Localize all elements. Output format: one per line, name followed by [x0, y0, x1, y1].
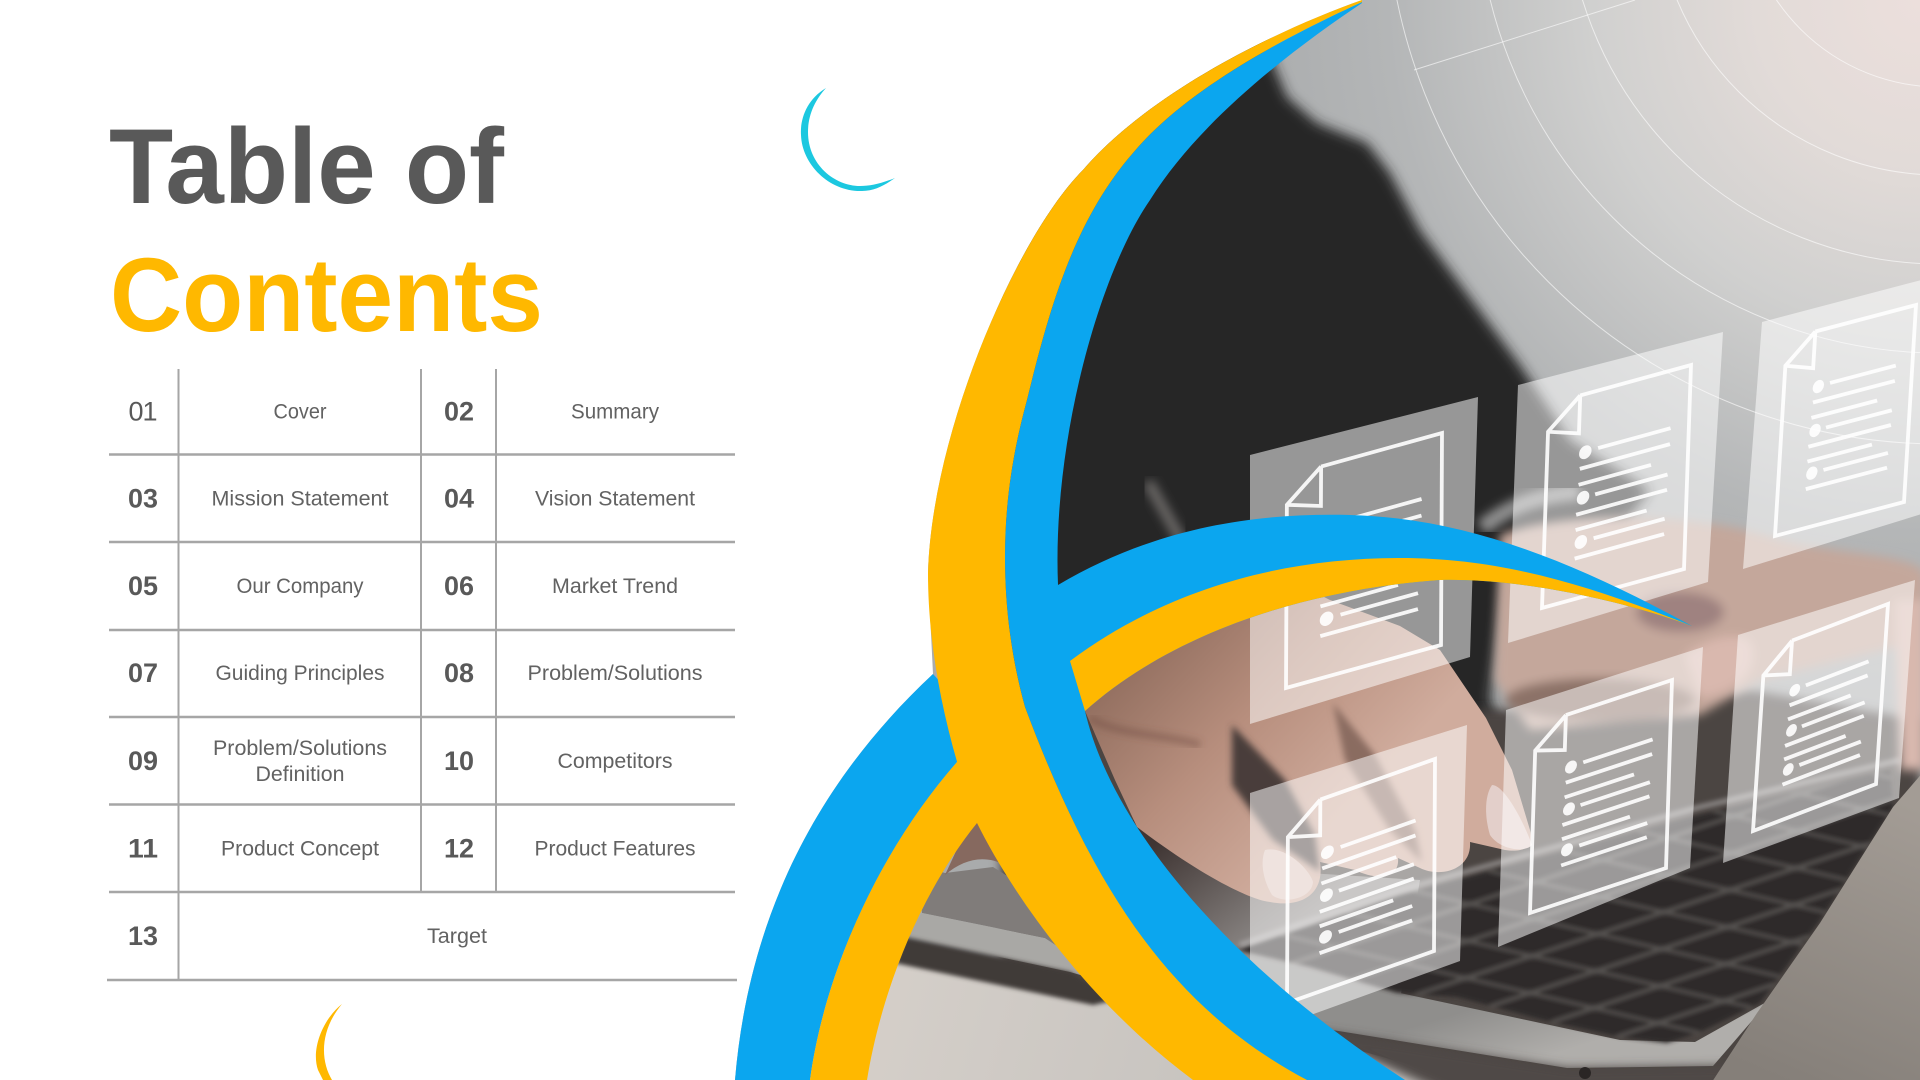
row 5: Competitors	[558, 750, 672, 773]
fingernail one	[1263, 849, 1313, 900]
row 2: Mission Statement	[212, 488, 389, 510]
glass panels top row and bottom row	[1250, 279, 1920, 1037]
row 5: 09	[128, 746, 158, 776]
row 6: Product Features	[534, 838, 696, 860]
knuckle corner	[945, 823, 998, 875]
finger gap one	[1232, 725, 1320, 872]
laptop reflection strip	[1240, 760, 1900, 945]
row 2: Vision Statement	[535, 488, 695, 510]
laptop surface left corner	[922, 867, 1056, 946]
document icons	[1286, 305, 1916, 1003]
row 1: Cover	[274, 400, 326, 424]
row 7: Target	[427, 925, 487, 948]
panel E	[1498, 647, 1703, 947]
main blue band with upper sweep	[1005, 2, 1692, 1080]
row 2: 04	[444, 484, 474, 514]
laptop lid	[1710, 770, 1920, 1080]
keyboard	[1237, 770, 1893, 1043]
yellow upper sweep	[1070, 558, 1692, 711]
row 1: Summary	[571, 400, 659, 424]
laptop surface	[1133, 820, 1420, 994]
panel D	[1250, 725, 1467, 1037]
row 5: Problem/Solutions	[213, 737, 387, 760]
panel C	[1743, 279, 1920, 569]
panel F	[1723, 580, 1915, 863]
photo: hands typing on a laptop with virtual documents	[730, 0, 1920, 1080]
icon: document A	[1286, 433, 1442, 688]
icon: document F	[1753, 604, 1888, 831]
lower-left blue crescent	[735, 674, 975, 1080]
heading: Table of: Table of	[109, 106, 504, 226]
row 3: 05	[128, 571, 158, 601]
finger crease	[1090, 718, 1200, 745]
row 5	[128, 737, 672, 786]
photo background	[730, 0, 1920, 1080]
row 3: 06	[444, 571, 474, 601]
heading: Contents: Contents	[110, 237, 543, 354]
row 5: 10	[444, 746, 474, 776]
row 4: 07	[128, 658, 158, 688]
panel B	[1508, 332, 1723, 643]
row 4: Guiding Principles	[216, 662, 384, 685]
pen highlight	[1148, 482, 1182, 542]
row 7: 13	[128, 921, 158, 951]
icon: cyan crescent	[801, 88, 895, 191]
row 4: 08	[444, 658, 474, 688]
finger gap two	[1333, 703, 1422, 862]
row 2	[128, 484, 695, 514]
dark silhouette	[1000, 20, 1650, 780]
row 3: Our Company	[236, 575, 364, 598]
main yellow band	[928, 0, 1362, 1080]
row 1	[128, 396, 659, 426]
row 1: 01	[128, 396, 158, 426]
lower-left yellow crescent	[810, 762, 990, 1080]
icon: document D	[1287, 759, 1435, 1003]
concentric thin arcs	[1386, 0, 1920, 444]
row 3: Market Trend	[552, 575, 678, 598]
row 7	[128, 921, 487, 951]
left hand	[1085, 597, 1531, 904]
row 1: 02	[444, 396, 474, 426]
row 6: 12	[444, 834, 474, 864]
icon: yellow crescent	[316, 1004, 342, 1080]
row 6	[128, 834, 696, 864]
contents table	[107, 369, 737, 980]
title	[109, 106, 543, 354]
right hand	[1495, 518, 1920, 770]
table grid lines	[107, 369, 737, 980]
row 5: Definition	[256, 763, 344, 786]
icon: document C	[1775, 305, 1916, 536]
icon: document E	[1530, 680, 1672, 913]
row 4	[128, 658, 702, 688]
laptop port	[1579, 1067, 1591, 1079]
row 3	[128, 571, 678, 601]
icon: document B	[1542, 365, 1691, 608]
lower dark background	[1000, 690, 1920, 1080]
row 6: 11	[128, 834, 158, 864]
row 2: 03	[128, 484, 158, 514]
shadow under laptop right	[1300, 1028, 1730, 1080]
row 6: Product Concept	[221, 838, 379, 860]
laptop silver lip	[923, 913, 1080, 975]
row 4: Problem/Solutions	[528, 662, 702, 685]
laptop base grey	[1290, 993, 1764, 1068]
fingernail two	[1486, 785, 1532, 849]
wood desk	[810, 948, 1434, 1080]
panel A	[1250, 397, 1478, 724]
shadow under laptop left	[895, 937, 1115, 1005]
watch band	[1482, 492, 1580, 528]
